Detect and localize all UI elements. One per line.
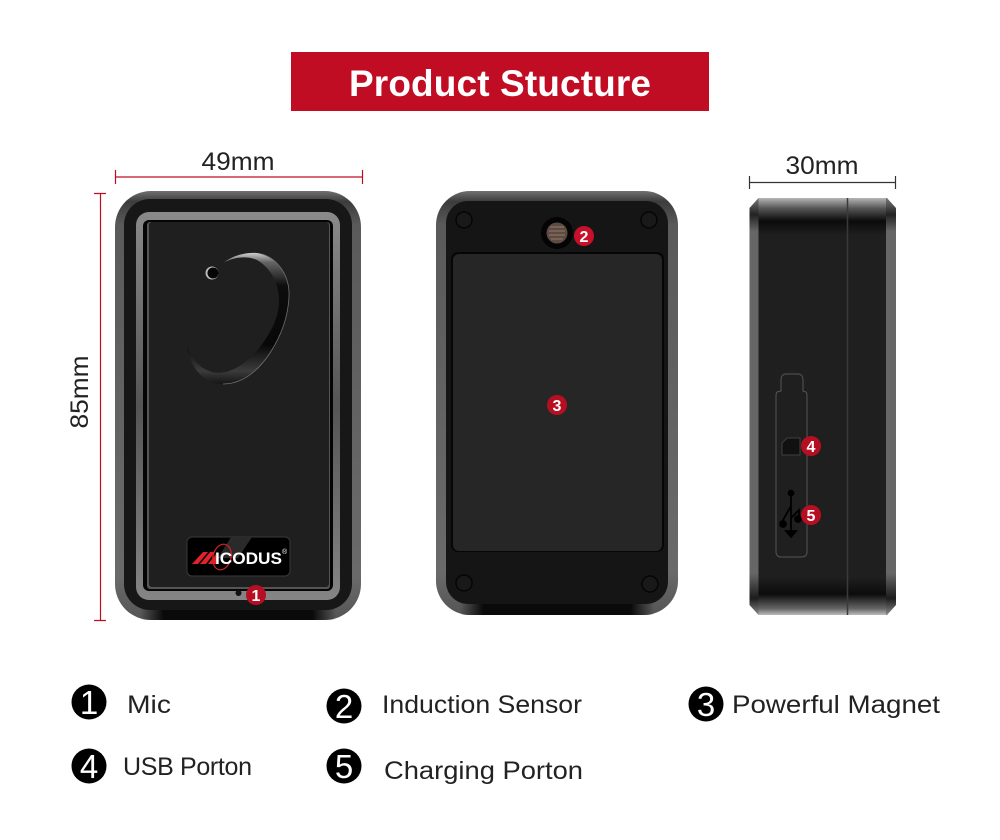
legend: 1 Mic: Mic <box>127 691 171 719</box>
red marker 5 <box>801 505 821 525</box>
pinhole <box>206 266 218 280</box>
red marker 4 <box>801 436 821 456</box>
red marker 3 <box>547 395 567 415</box>
legend: 3 Powerful Magnet <box>688 686 940 723</box>
red marker 2: 2 <box>580 229 589 246</box>
MiCODUS logo badge: ICODUS <box>215 549 282 568</box>
legend: 4 USB Porton: 4 <box>80 748 98 785</box>
red marker 1: 1 <box>252 588 261 605</box>
corner screws <box>456 212 658 592</box>
magnet plate <box>451 252 664 552</box>
depth dimension: 30mm: 30mm <box>786 152 858 180</box>
legend: 1 Mic <box>72 684 171 721</box>
device side view <box>750 198 896 615</box>
USB trident symbol <box>780 490 801 537</box>
port cover <box>776 374 807 557</box>
width dimension: 49mm: 49mm <box>202 148 274 176</box>
mic hole <box>236 590 242 596</box>
legend: 5 Charging Porton: 5 <box>335 748 353 785</box>
crescent emblem <box>187 253 289 384</box>
MiCODUS logo badge <box>187 537 290 576</box>
legend: 4 USB Porton <box>72 748 252 785</box>
induction sensor <box>541 217 573 249</box>
red marker 2 <box>574 226 594 246</box>
legend: 1 Mic: 1 <box>80 684 98 721</box>
width dimension: 49mm <box>116 148 362 184</box>
legend: 4 USB Porton: USB Porton <box>123 753 252 781</box>
height dimension: 85mm <box>66 194 106 620</box>
legend: 5 Charging Porton: Charging Porton <box>384 757 583 785</box>
MiCODUS logo badge: ® <box>282 548 288 556</box>
red marker 4: 4 <box>807 439 816 456</box>
legend: 5 Charging Porton <box>326 748 583 785</box>
depth dimension: 30mm <box>750 152 896 189</box>
device front view <box>115 191 361 620</box>
title banner: Product Stucture <box>349 63 651 104</box>
height dimension: 85mm: 85mm <box>66 356 94 428</box>
red marker 1 <box>246 585 266 605</box>
title banner <box>291 52 709 111</box>
legend: 3 Powerful Magnet: 3 <box>697 686 715 723</box>
legend: 2 Induction Sensor <box>326 688 582 725</box>
legend: 2 Induction Sensor: 2 <box>335 688 353 725</box>
red marker 3: 3 <box>553 398 562 415</box>
legend: 3 Powerful Magnet: Powerful Magnet <box>732 691 940 719</box>
red marker 5: 5 <box>807 508 816 525</box>
device back view <box>436 191 678 615</box>
USB port glyph <box>782 438 800 455</box>
legend: 2 Induction Sensor: Induction Sensor <box>382 691 582 719</box>
